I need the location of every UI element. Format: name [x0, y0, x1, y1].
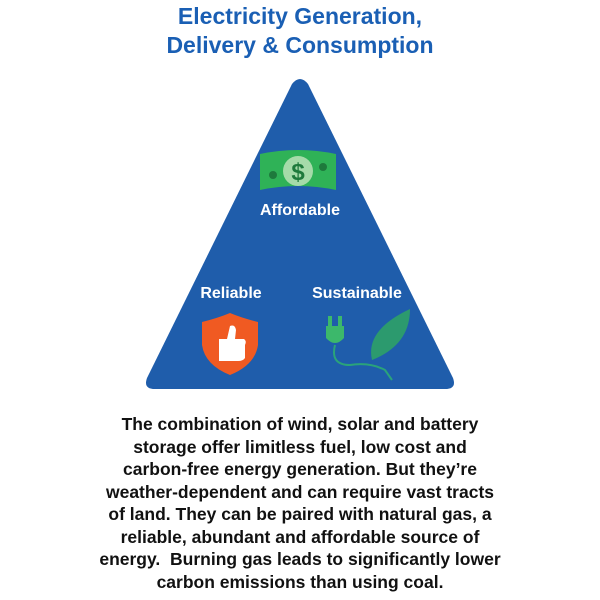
- body text: storage offer limitless fuel, low cost and: [133, 436, 467, 456]
- icon: money bill: [260, 150, 336, 190]
- label: Reliable: Reliable: [200, 285, 262, 302]
- icon: money bill: $: [291, 159, 305, 186]
- body text: reliable, abundant and affordable source of: [121, 526, 479, 546]
- triangle: [146, 79, 454, 389]
- body text: carbon emissions than using coal.: [157, 572, 443, 592]
- body text: carbon-free energy generation. But they’re: [123, 459, 477, 479]
- title: Delivery & Consumption: [166, 32, 434, 58]
- pyramid diagram: [146, 79, 454, 389]
- icon: plug and leaf: [326, 309, 410, 380]
- body text: energy. Burning gas leads to significantly lower: [99, 549, 501, 569]
- body text: weather-dependent and can require vast tracts: [106, 482, 494, 502]
- body text: [99, 414, 501, 592]
- icon: shield thumbs up: [202, 313, 258, 375]
- body text: of land. They can be paired with natural gas, a: [108, 504, 492, 524]
- label: Sustainable: Sustainable: [312, 285, 402, 302]
- title: Electricity Generation,: [178, 3, 422, 29]
- body text: The combination of wind, solar and battery: [122, 414, 478, 434]
- label: Affordable: Affordable: [260, 202, 340, 219]
- title: [166, 3, 434, 58]
